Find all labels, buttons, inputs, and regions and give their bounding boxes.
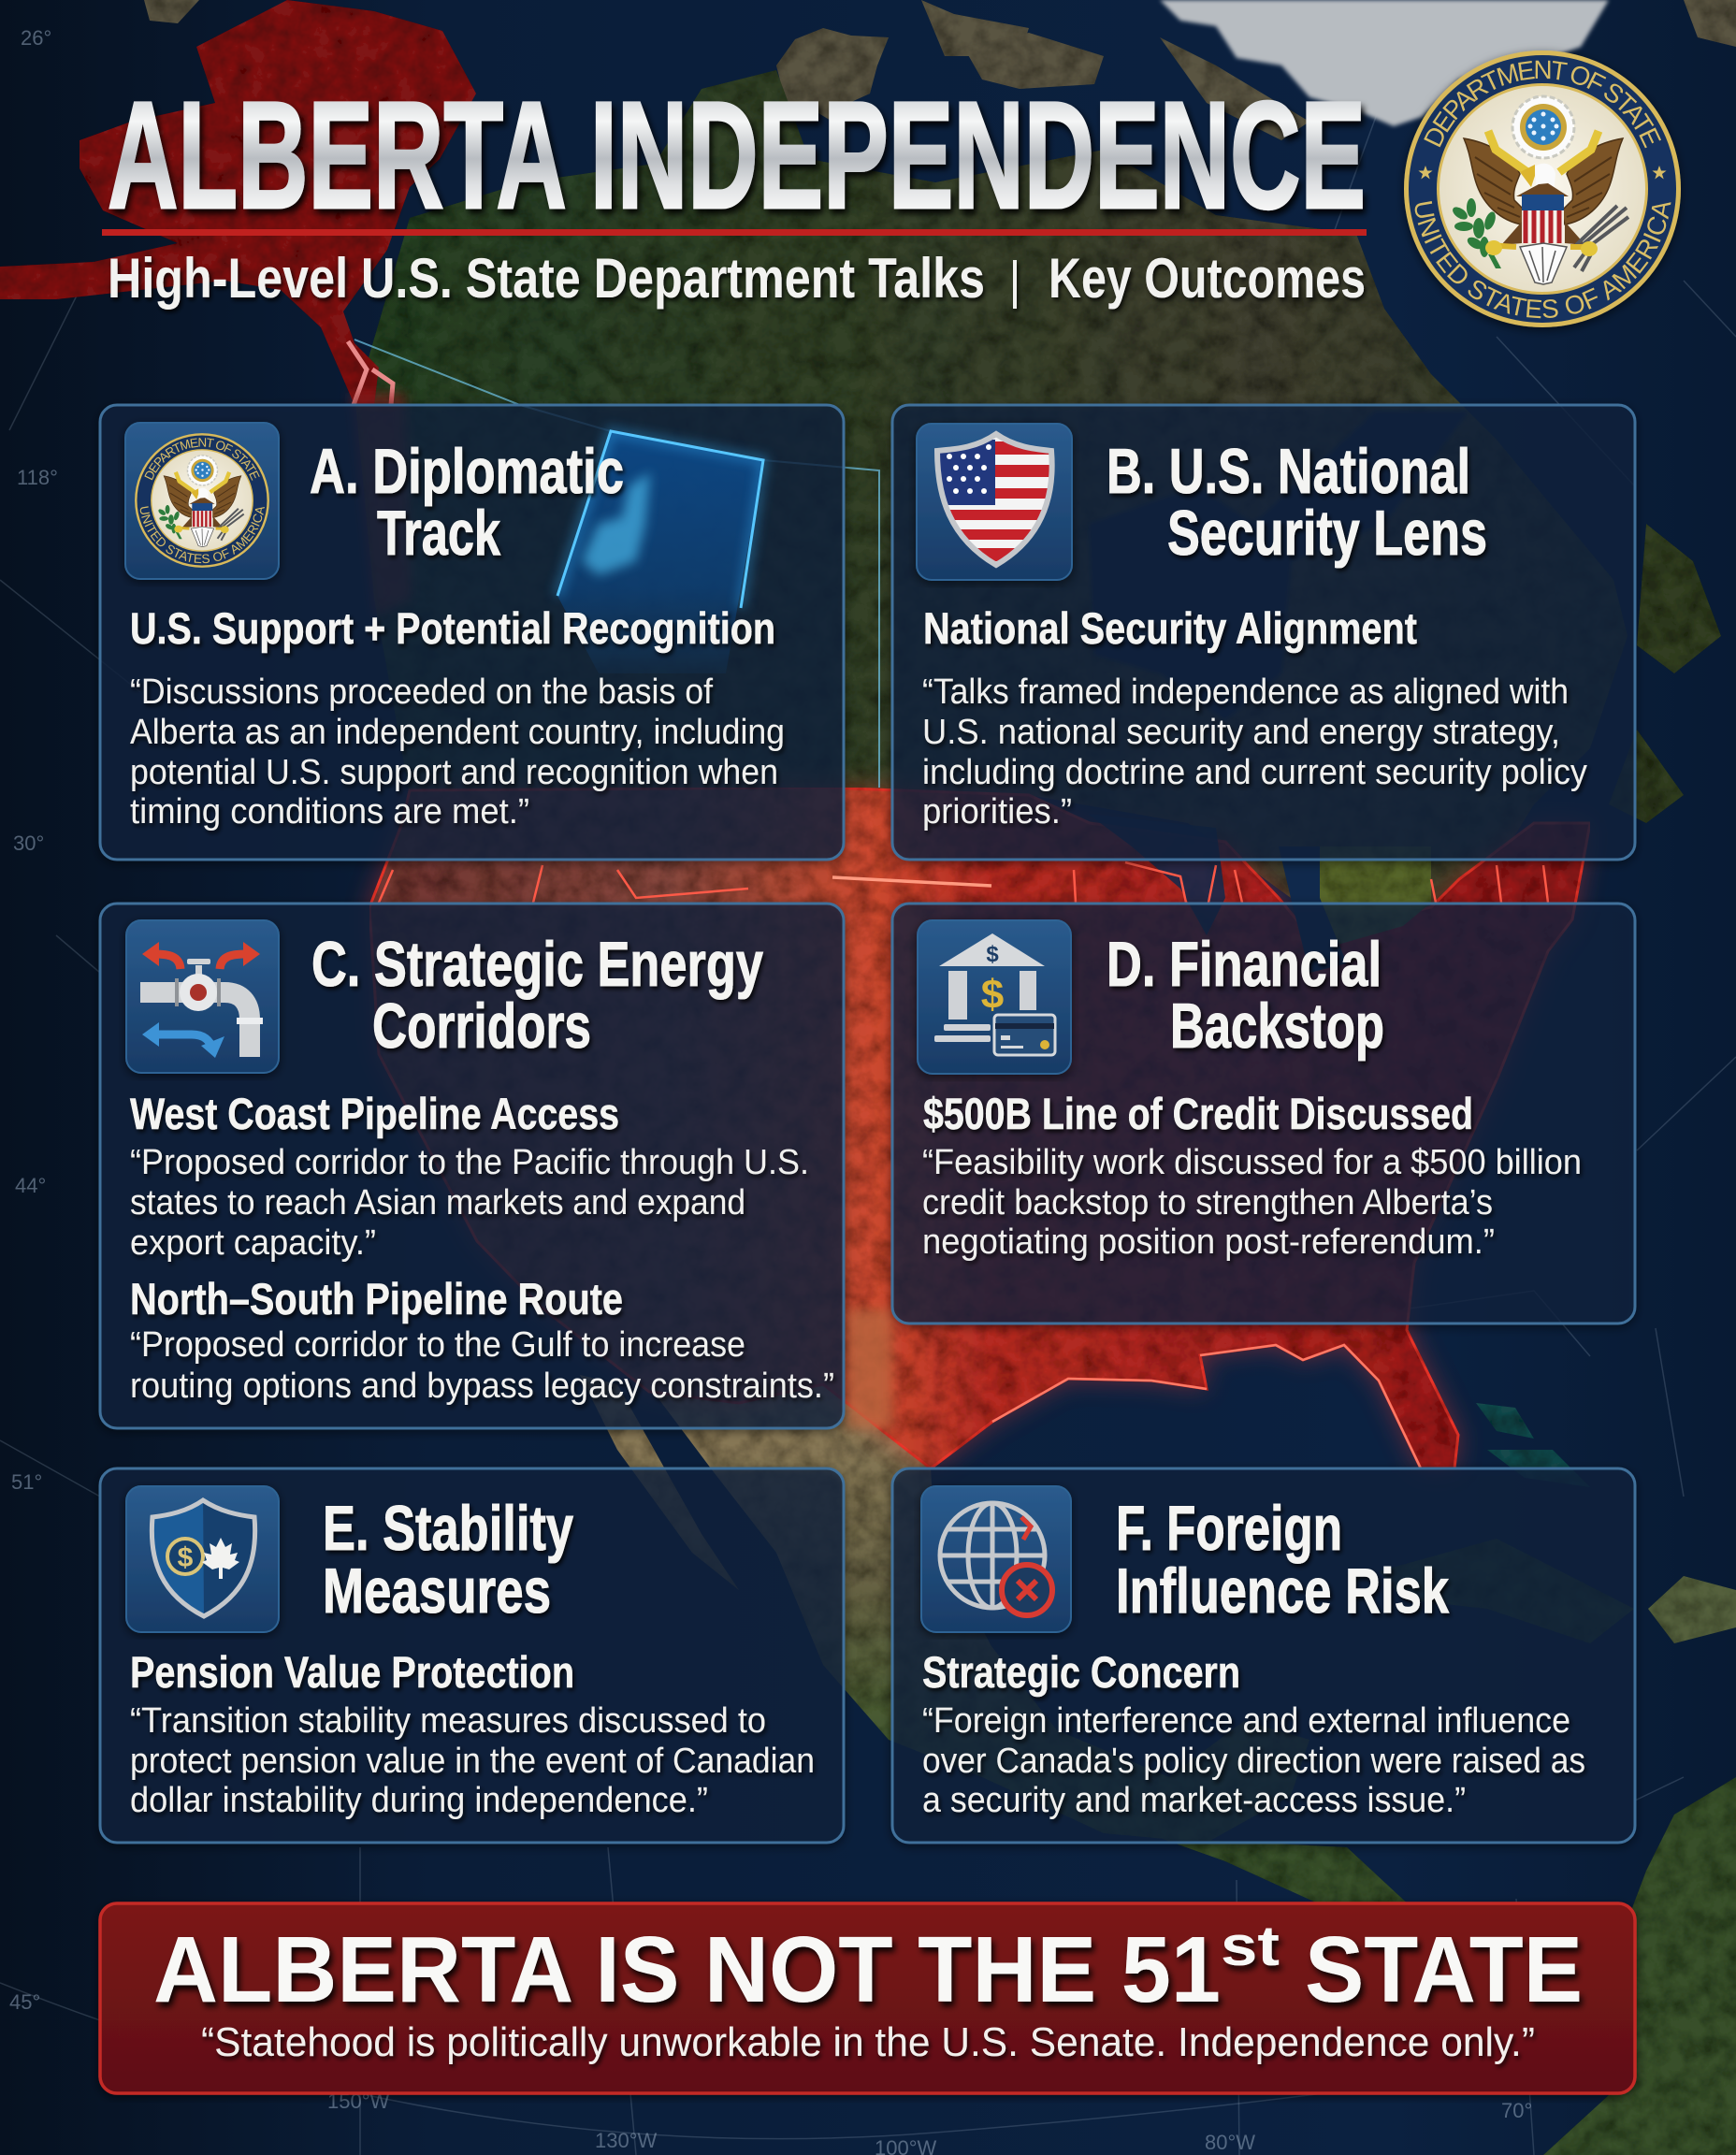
seal: Department of State: DEPARTMENT OF STATE [1424, 60, 1661, 148]
graticule lines and labels: 45° [9, 1990, 40, 2014]
panel B text [922, 436, 1587, 832]
banner headline: STATE [1305, 1917, 1583, 2022]
panel: F. Foreign Influence Risk [892, 1468, 1635, 1843]
banner: not the 51st state [100, 1903, 1635, 2093]
panel: D. Financial Backstop [892, 904, 1635, 1323]
panel B text: B. U.S. National [1107, 436, 1470, 507]
panel E text: dollar instability during independence.” [130, 1781, 708, 1820]
panel A text: Alberta as an independent country, including [130, 713, 785, 752]
panel C text: states to reach Asian markets and expand [130, 1183, 745, 1222]
boundary connector lines [354, 340, 879, 788]
banner headline: st [1221, 1915, 1280, 1977]
panel C text [130, 929, 834, 1406]
panel A text: potential U.S. support and recognition when [130, 753, 778, 792]
panel D text: negotiating position post-referendum.” [922, 1222, 1495, 1262]
panel F text: F. Foreign [1116, 1493, 1342, 1564]
subtitle: High-Level U.S. State Department Talks [108, 247, 985, 310]
panel A text: timing conditions are met.” [130, 792, 529, 832]
panel B text: including doctrine and current security policy [922, 753, 1587, 792]
panel: B. U.S. National Security Lens [892, 405, 1635, 860]
panel F text: a security and market-access issue.” [922, 1781, 1466, 1820]
graticule lines and labels: 130°W [595, 2129, 658, 2152]
panel E text: Pension Value Protection [130, 1647, 574, 1697]
subtitle: Key Outcomes [1049, 247, 1366, 310]
panel F text [922, 1493, 1585, 1820]
graticule lines and labels: 150°W [327, 2090, 390, 2113]
Pacific coast strip [351, 393, 412, 617]
panel A text: A. Diplomatic [310, 436, 624, 507]
panel: C. Strategic Energy Corridors [100, 904, 844, 1428]
panel D text [922, 929, 1582, 1262]
Alberta highlight [557, 431, 763, 673]
panel F text: “Foreign interference and external influence [922, 1701, 1570, 1741]
panel E text: Measures [323, 1555, 551, 1627]
United States [369, 788, 1590, 1468]
seal: Department of State: UNITED STATES OF AMERICA [1414, 201, 1671, 318]
panel C text: “Proposed corridor to the Pacific through U.S. [130, 1143, 809, 1182]
icon: shield with coin and maple leaf [126, 1486, 279, 1632]
panel C text: “Proposed corridor to the Gulf to increase [130, 1325, 745, 1365]
seal: Department of State [1401, 47, 1684, 333]
icon: bank and credit card: $ [981, 972, 1004, 1018]
graticule lines and labels: 30° [13, 832, 44, 855]
icon: bank and credit card: $ [986, 942, 999, 967]
Mexico [580, 1375, 1309, 1843]
panel D text: “Feasibility work discussed for a $500 billion [922, 1143, 1582, 1182]
panel D text: Backstop [1170, 991, 1384, 1062]
panel A text [130, 436, 785, 832]
graticule lines and labels: 118° [17, 466, 58, 489]
title underline [102, 229, 1367, 236]
panel C text: routing options and bypass legacy constraints.” [130, 1367, 834, 1406]
graticule lines and labels: 26° [21, 26, 51, 50]
icon: globe with warning mark [921, 1486, 1071, 1632]
panel B text: “Talks framed independence as aligned with [922, 673, 1569, 712]
panel: A. Diplomatic Track [95, 400, 851, 871]
icon: state seal: DEPARTMENT OF STATE [144, 438, 260, 481]
panel B text: U.S. national security and energy strategy, [922, 713, 1560, 752]
Atlantic Canada [1609, 524, 1721, 823]
Alaska panhandle highlight [348, 341, 393, 405]
Alaska [0, 0, 476, 405]
panel C text: export capacity.” [130, 1223, 376, 1263]
panel F text: Influence Risk [1116, 1555, 1449, 1627]
panel E text: E. Stability [323, 1493, 573, 1564]
icon: state seal [122, 422, 282, 586]
icon: flag shield [917, 424, 1072, 580]
panel D text: credit backstop to strengthen Alberta’s [922, 1183, 1493, 1222]
icon: pipeline valve with arrows [126, 920, 279, 1073]
panel E text: “Transition stability measures discussed to [130, 1701, 766, 1741]
panel D text: D. Financial [1107, 929, 1382, 1000]
graticule lines and labels: 51° [11, 1470, 42, 1494]
Greenland [1160, 0, 1609, 126]
panel C text: North–South Pipeline Route [130, 1274, 623, 1323]
graticule lines and labels: 80°W [1205, 2131, 1255, 2154]
Central and South America [1160, 1777, 1736, 2155]
graticule lines and labels: 44° [15, 1174, 46, 1197]
icon: bank and credit card [918, 920, 1071, 1074]
banner headline: ALBERTA IS NOT THE 51 [153, 1917, 1221, 2022]
panel F text: over Canada's policy direction were raised as [922, 1742, 1585, 1781]
panel D text: $500B Line of Credit Discussed [923, 1089, 1473, 1138]
Caribbean islands [1379, 1403, 1736, 1643]
icon: state seal: UNITED STATES OF AMERICA [140, 506, 265, 563]
panel: E. Stability Measures [100, 1468, 844, 1843]
arctic islands [144, 0, 1736, 140]
panel A text: U.S. Support + Potential Recognition [130, 603, 775, 653]
panel C text: C. Strategic Energy [311, 929, 763, 1000]
icon: shield with coin and maple leaf: $ [178, 1542, 194, 1573]
panel A text: Track [377, 498, 500, 569]
Hudson Bay [1089, 412, 1468, 720]
panel A text: “Discussions proceeded on the basis of [130, 673, 713, 712]
Canada [355, 70, 1628, 945]
panel C text: Corridors [372, 991, 591, 1062]
panel B text: Security Lens [1167, 498, 1487, 569]
panel C text: West Coast Pipeline Access [130, 1089, 619, 1138]
banner quote: “Statehood is politically unworkable in the U.S. Senate. Independence only.” [201, 2019, 1535, 2065]
graticule lines and labels: 70° [1501, 2099, 1532, 2122]
panel F text: Strategic Concern [922, 1647, 1240, 1697]
panel B text: National Security Alignment [923, 603, 1417, 653]
panel B text: priorities.” [922, 792, 1072, 832]
panel E text: protect pension value in the event of Canadian [130, 1742, 815, 1781]
panel E text [130, 1493, 815, 1820]
